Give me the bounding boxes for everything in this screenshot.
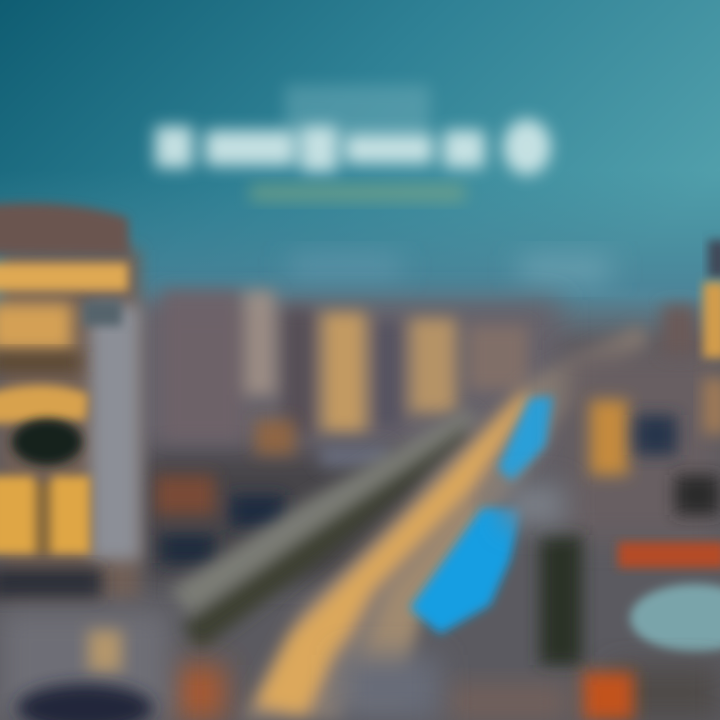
dome roof xyxy=(0,203,130,256)
plinth xyxy=(0,568,102,600)
right side district xyxy=(445,240,720,720)
lower windows xyxy=(0,476,90,554)
title xyxy=(155,85,551,202)
gold cornice xyxy=(0,263,128,291)
amber balcony xyxy=(0,385,88,424)
lower central ground xyxy=(175,485,565,720)
dark arch xyxy=(12,419,82,465)
red terrace xyxy=(618,542,720,568)
elevated road xyxy=(170,410,480,650)
title word xyxy=(155,119,551,175)
stone column xyxy=(90,305,140,560)
green subtitle xyxy=(250,184,465,202)
bottom left street xyxy=(0,610,170,720)
dark tree xyxy=(540,535,582,665)
distant skyline xyxy=(290,255,610,283)
title glow panel xyxy=(285,85,430,140)
right tower xyxy=(708,240,720,278)
upper window xyxy=(0,303,72,351)
left landmark building xyxy=(0,203,140,600)
street level blocks xyxy=(155,420,390,563)
blue pool: small xyxy=(498,396,554,482)
pale teal plaza xyxy=(630,584,720,652)
blue pool: large xyxy=(410,508,522,634)
mid-ground buildings xyxy=(130,290,560,580)
golden boulevard xyxy=(240,325,650,720)
orange rooftop xyxy=(582,672,634,720)
